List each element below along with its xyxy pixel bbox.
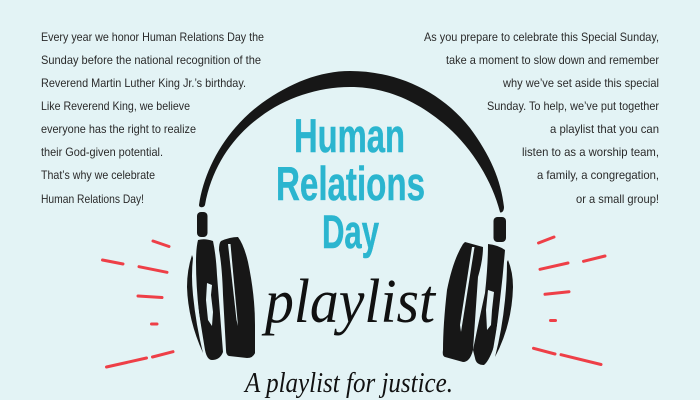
title: Human Relations Day: Day	[322, 205, 379, 258]
text block: right introduction: a playlist that you can	[550, 122, 659, 136]
heading: playlist: playlist	[261, 268, 437, 336]
text block: left introduction: their God-given potential.	[41, 145, 163, 159]
left ear cup	[187, 212, 255, 360]
headband	[199, 71, 504, 212]
sound lines: left	[102, 241, 173, 367]
text block: right introduction: or a small group!	[576, 192, 659, 206]
text block: right introduction: As you prepare to celebrate this Special Sunday,	[424, 30, 659, 44]
text block: right introduction: Sunday. To help, we’ve put together	[487, 99, 659, 113]
text block: right introduction	[424, 30, 659, 206]
text block: left introduction: Like Reverend King, we believe	[41, 99, 190, 113]
text block: left introduction: Every year we honor Human Relations Day the	[41, 30, 264, 44]
icon: headphones	[187, 71, 513, 365]
text block: right introduction: a family, a congregation,	[537, 168, 659, 182]
title: Human Relations Day: Relations	[276, 157, 425, 210]
sound lines: right	[534, 237, 605, 364]
title: Human Relations Day: Human	[294, 109, 405, 162]
text block: left introduction: everyone has the right to realize	[41, 122, 196, 136]
text block: right introduction: listen to as a worship team,	[522, 145, 659, 159]
text block: left introduction: Reverend Martin Luther King Jr.’s birthday.	[41, 76, 246, 90]
text block: left introduction: Sunday before the national recognition of the	[41, 53, 261, 67]
text block: right introduction: take a moment to slow down and remember	[446, 53, 659, 67]
text block: right introduction: why we’ve set aside this special	[502, 76, 659, 90]
tagline: A playlist for justice.	[243, 368, 453, 399]
text block: left introduction: Human Relations Day!	[41, 192, 144, 206]
title: Human Relations Day	[276, 109, 425, 258]
text block: left introduction: That’s why we celebrate	[41, 168, 155, 182]
text block: left introduction	[41, 30, 264, 206]
right ear cup	[443, 217, 513, 365]
